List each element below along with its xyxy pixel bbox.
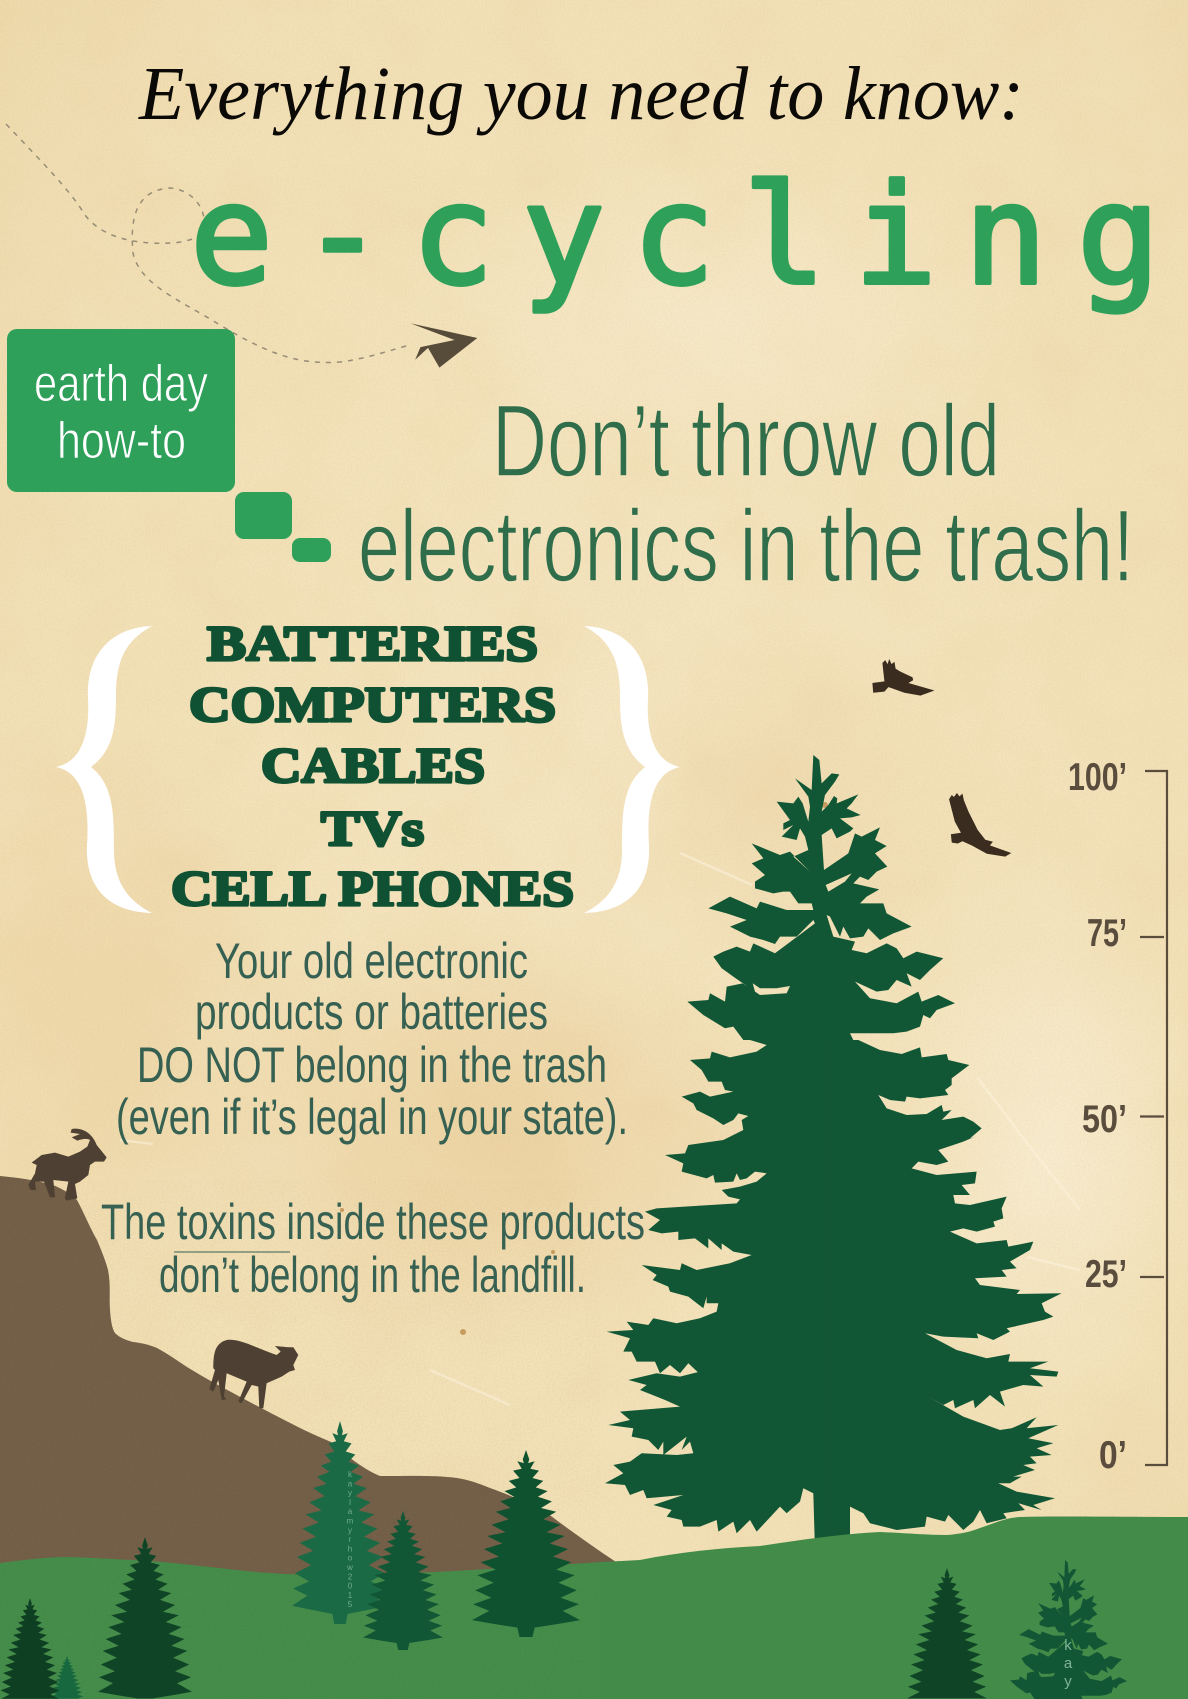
goat on slope (209, 1340, 298, 1408)
list of e-waste items: BATTERIES (207, 615, 538, 671)
tree bottom left corner (1, 1598, 59, 1699)
tree bottom right (907, 1568, 987, 1698)
ruler labels: 0’ (1099, 1434, 1127, 1477)
paragraph: toxins: don’t belong in the landfill. (159, 1247, 586, 1303)
small tree with watermark (292, 1421, 388, 1624)
ruler labels: 25’ (1085, 1253, 1127, 1296)
left brace (56, 626, 152, 913)
paragraph: toxins: The toxins inside these products (101, 1194, 645, 1250)
small tree (363, 1511, 443, 1650)
dashed flight path (6, 124, 410, 363)
small tree with watermark: kaylamyrhow2015 (346, 1470, 354, 1610)
slogan: don't throw old electronics in the trash (358, 384, 1134, 603)
title: everything you need to know: Everything you need to know: (138, 52, 1024, 136)
ruler labels: 75’ (1087, 912, 1127, 955)
badge: earth day how-to: how-to (57, 412, 186, 470)
ruler labels (1068, 756, 1127, 1477)
bird lower (949, 793, 1011, 857)
goat on cliff (28, 1129, 107, 1201)
list of e-waste items: CELL PHONES (171, 860, 574, 916)
bird upper (872, 659, 934, 696)
badge: earth day how-to: earth day (34, 355, 208, 413)
paragraph: electronics do not belong in the trash: (even if it’s legal in your state). (116, 1089, 628, 1145)
small tree (472, 1450, 580, 1637)
badge: earth day how-to (7, 329, 235, 492)
fir bottom right with watermark: k (1064, 1637, 1072, 1654)
slogan: don't throw old electronics in the trash: Don’t throw old (492, 384, 1000, 498)
tree bottom left (51, 1656, 83, 1699)
large fir tree (605, 755, 1062, 1550)
ruler labels: 100’ (1068, 756, 1127, 799)
grass ground (0, 1517, 1188, 1699)
list of e-waste items (171, 615, 574, 916)
paragraph: electronics do not belong in the trash: DO NOT belong in the trash (137, 1037, 607, 1093)
right brace (584, 626, 680, 913)
brown hillside (0, 1176, 616, 1699)
foreground tree (98, 1537, 192, 1698)
list of e-waste items: CABLES (261, 737, 485, 793)
paragraph: toxins (101, 1194, 645, 1303)
icon: paper plane (411, 323, 477, 368)
pixel squares (235, 492, 331, 562)
fir bottom right with watermark: a (1064, 1655, 1073, 1672)
fir bottom right with watermark: y (1064, 1673, 1072, 1690)
paragraph: electronics do not belong in the trash (116, 933, 628, 1145)
paragraph: electronics do not belong in the trash: products or batteries (195, 984, 548, 1040)
list of e-waste items: TVs (321, 800, 424, 856)
fir bottom right with watermark (1010, 1560, 1127, 1699)
list of e-waste items: COMPUTERS (189, 676, 556, 732)
ruler labels: 50’ (1082, 1098, 1127, 1141)
height ruler (1140, 771, 1167, 1465)
heading: e-cycling: e-cycling (190, 155, 1160, 316)
ground and hill grain (0, 1180, 600, 1699)
paragraph: electronics do not belong in the trash: Your old electronic (215, 933, 528, 989)
